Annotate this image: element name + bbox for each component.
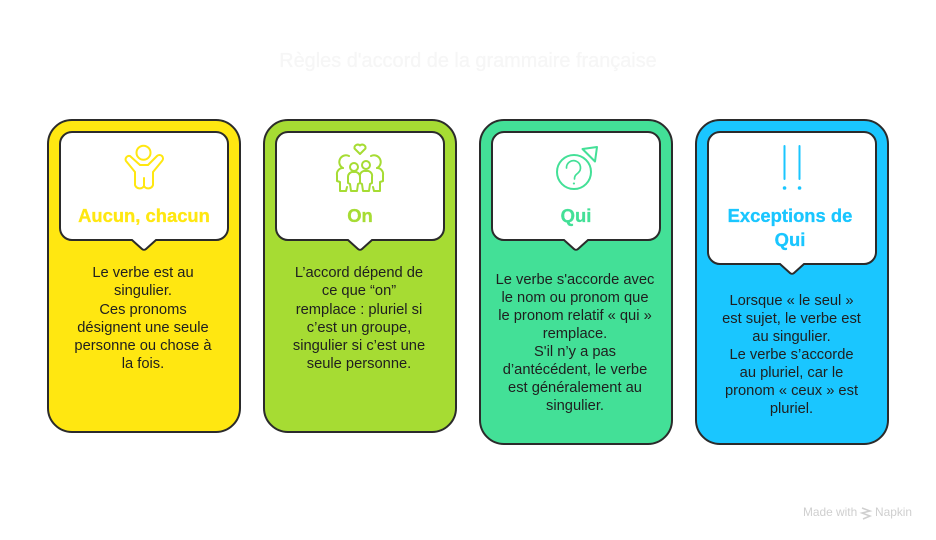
- callout: Qui: [492, 132, 660, 250]
- icon: person with raised arms: [126, 146, 163, 188]
- text block: ce que “on”: [322, 283, 396, 299]
- text block: S'il n’y a pas: [534, 344, 616, 360]
- text block: au pluriel, car le: [740, 365, 843, 381]
- panel: Exceptions de Qui: [696, 120, 888, 444]
- title: Règles d'accord de la grammaire française: [279, 50, 657, 72]
- heading: On: [347, 205, 373, 226]
- watermark: Made with Napkin: [803, 505, 912, 519]
- text block: pronom « ceux » est: [725, 383, 858, 399]
- text block: le pronom relatif « qui »: [498, 308, 652, 324]
- icon: family with heart: [337, 145, 383, 191]
- watermark: Made with Napkin: Made with: [803, 505, 857, 519]
- icon: napkin logo: [862, 508, 870, 519]
- callout: On: [276, 132, 444, 250]
- text block: au singulier.: [752, 329, 831, 345]
- text block: Le verbe s'accorde avec: [496, 272, 654, 288]
- heading: Aucun, chacun: [78, 205, 210, 226]
- text block: est sujet, le verbe est: [722, 311, 861, 327]
- text block: remplace : pluriel si: [296, 302, 422, 318]
- text block: seule personne.: [307, 356, 411, 372]
- text block: Le verbe s’accorde: [729, 347, 854, 363]
- icon: question mark in male symbol: [557, 147, 597, 189]
- panel: Qui: [480, 120, 672, 444]
- text block: le nom ou pronom que: [502, 290, 648, 306]
- icon: double exclamation: [784, 146, 800, 188]
- text block: personne ou chose à: [74, 338, 212, 354]
- text block: c’est un groupe,: [307, 320, 411, 336]
- text block: désignent une seule: [77, 320, 209, 336]
- text block: pluriel.: [770, 401, 813, 417]
- text block: singulier.: [546, 398, 604, 414]
- heading: Qui: [775, 229, 805, 250]
- panel: Aucun, chacun: [48, 120, 240, 432]
- callout: Exceptions de Qui: [708, 132, 876, 274]
- heading: Qui: [561, 205, 591, 226]
- panel: On: [264, 120, 456, 432]
- text block: singulier si c’est une: [293, 338, 425, 354]
- text block: Le verbe est au: [92, 265, 194, 281]
- callout: Aucun, chacun: [60, 132, 228, 250]
- text block: d’antécédent, le verbe: [503, 362, 647, 378]
- text block: est généralement au: [508, 380, 642, 396]
- text block: Lorsque « le seul »: [729, 293, 854, 309]
- text block: la fois.: [122, 356, 164, 372]
- text block: remplace.: [543, 326, 607, 342]
- watermark: Made with Napkin: Napkin: [875, 505, 912, 519]
- text block: Ces pronoms: [99, 302, 187, 318]
- heading: Exceptions de: [728, 205, 852, 226]
- text block: singulier.: [114, 283, 172, 299]
- text block: L’accord dépend de: [295, 265, 423, 281]
